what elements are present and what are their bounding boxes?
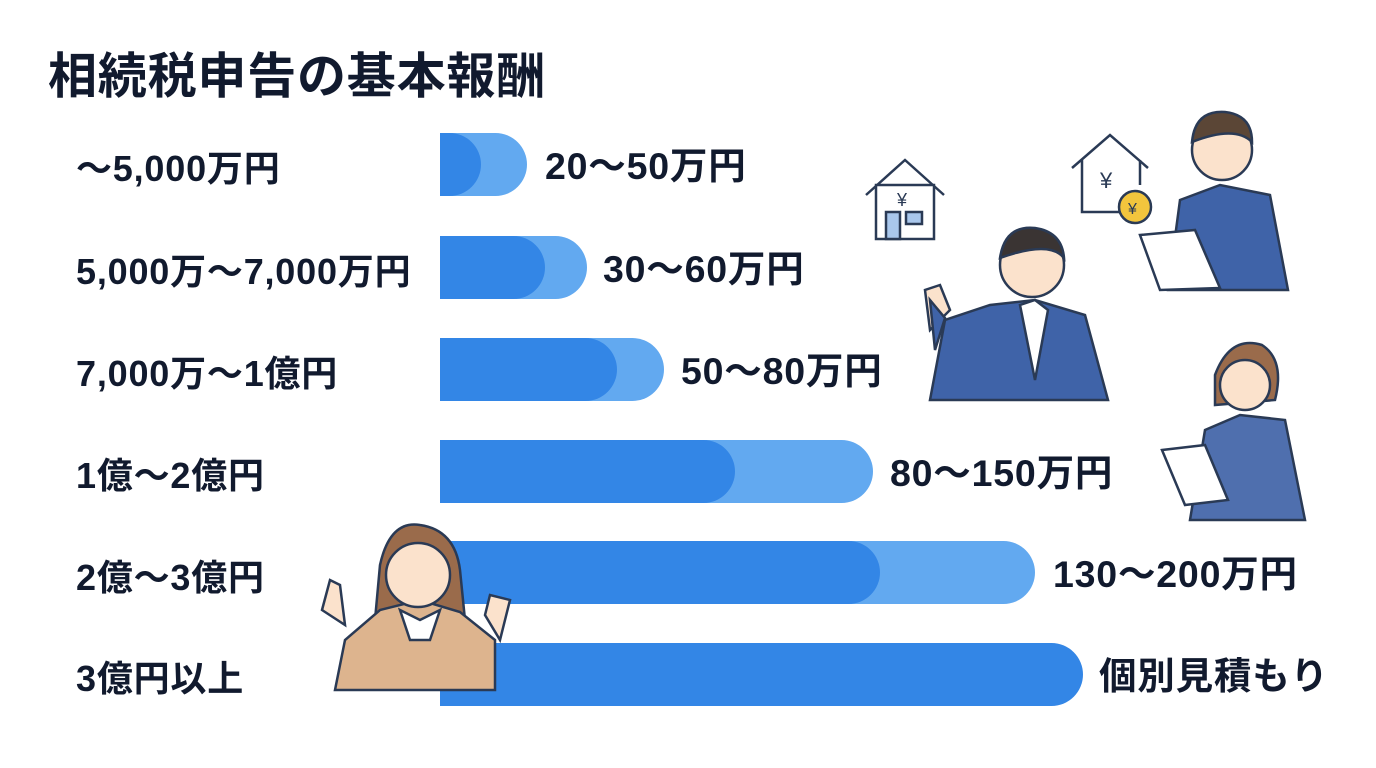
bar 3 xyxy=(440,338,664,401)
icon: house xyxy=(866,160,944,239)
value labels: 80〜150万円 xyxy=(890,452,1113,494)
value labels: 30〜60万円 xyxy=(603,248,805,290)
icon: house: ¥ xyxy=(896,190,908,210)
bar 2 xyxy=(440,236,587,299)
row labels: 2億〜3億円 xyxy=(76,557,265,598)
row labels: 3億円以上 xyxy=(76,658,244,699)
value labels: 50〜80万円 xyxy=(681,350,883,392)
title: 相続税申告の基本報酬 xyxy=(48,50,546,104)
person: man with tablet xyxy=(1140,112,1288,290)
bar 5 xyxy=(451,541,1035,604)
icon: house with coin xyxy=(1072,135,1151,223)
value labels: 130〜200万円 xyxy=(1053,553,1298,595)
row labels: 1億〜2億円 xyxy=(76,455,265,496)
row labels: 7,000万〜1億円 xyxy=(76,353,338,394)
icon: house with coin: ¥ xyxy=(1127,201,1137,218)
value labels: 個別見積もり xyxy=(1099,655,1329,697)
bar 1 xyxy=(440,133,527,196)
value labels xyxy=(545,145,1329,697)
person: woman in beige xyxy=(322,524,510,690)
icon: house with coin: ¥ xyxy=(1099,168,1113,193)
row labels xyxy=(76,148,411,699)
person: woman with tablet xyxy=(1162,343,1305,520)
row labels: 5,000万〜7,000万円 xyxy=(76,251,411,292)
row labels: 〜5,000万円 xyxy=(76,148,280,189)
value labels: 20〜50万円 xyxy=(545,145,747,187)
person: man pointing xyxy=(925,228,1108,400)
bar 6 xyxy=(440,643,1083,706)
bar 4 xyxy=(440,440,873,503)
